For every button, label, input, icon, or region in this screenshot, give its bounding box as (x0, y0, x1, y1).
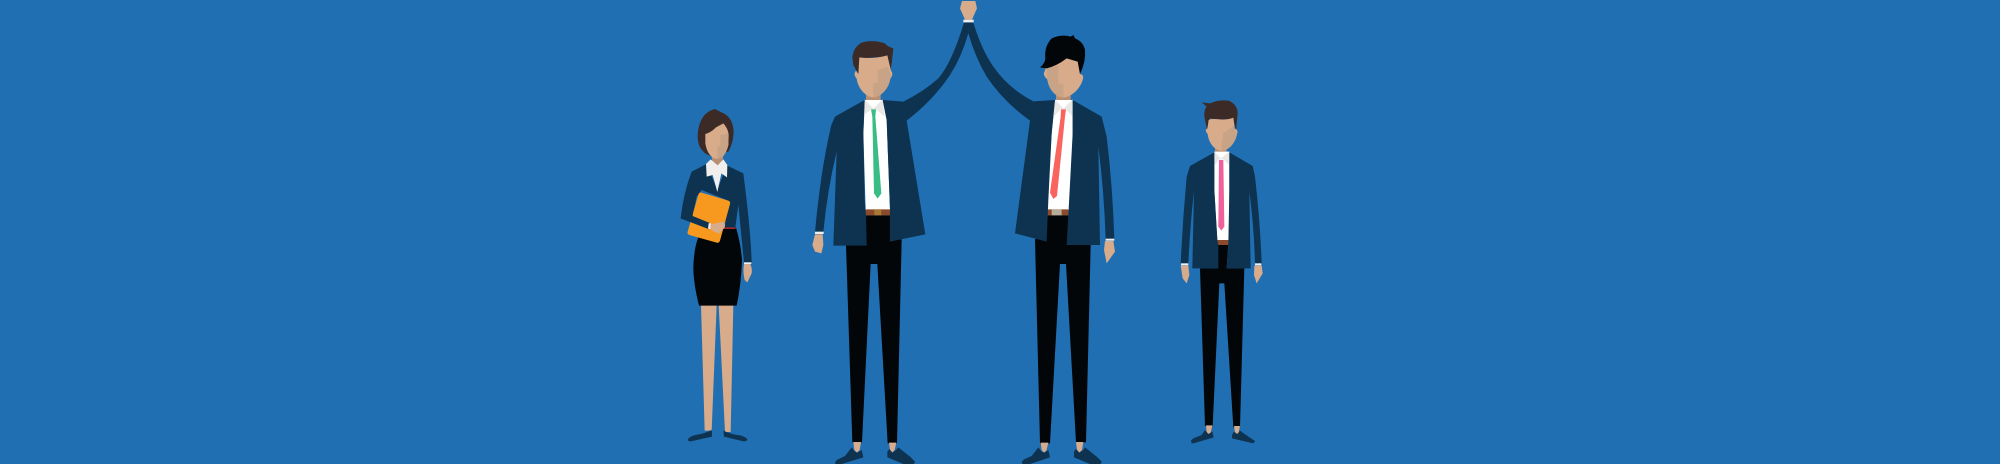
right man jacket (968, 23, 1114, 245)
left man pants (846, 215, 902, 443)
left man left cuff (815, 232, 824, 234)
woman face shadow (717, 133, 728, 159)
left man face shadow (873, 67, 891, 97)
woman right hand (743, 264, 752, 282)
figure: man in red tie raising arm (968, 23, 1115, 464)
left man left hand (812, 234, 823, 253)
woman jacket (681, 164, 752, 262)
small man shoes (1191, 430, 1255, 443)
left man hair (852, 41, 893, 74)
small man jacket (1181, 152, 1262, 268)
small man face shadow (1222, 126, 1237, 151)
woman collar (706, 159, 727, 192)
folder (687, 193, 730, 243)
right man face (1044, 53, 1083, 97)
right man shirt (1047, 100, 1073, 210)
woman shoes (688, 430, 747, 441)
woman skirt (693, 228, 742, 306)
woman legs (701, 305, 733, 432)
right man hair (1040, 35, 1085, 74)
left man upper body (812, 23, 973, 253)
woman hand on folder (711, 222, 725, 234)
right man face shadow (1047, 65, 1063, 97)
green tie (871, 109, 881, 199)
small man shirt (1214, 152, 1229, 240)
woman belt (723, 227, 736, 229)
left man jacket (815, 23, 973, 246)
small man hands (1181, 266, 1263, 283)
right man feet (1022, 442, 1102, 464)
right man collar (1053, 99, 1073, 117)
small man belt (1217, 240, 1228, 245)
pink tie (1218, 160, 1224, 231)
left man face (854, 55, 892, 97)
left man shirt (863, 100, 890, 210)
woman face (705, 123, 729, 159)
left man belt buckle (874, 209, 881, 215)
woman cuff (708, 223, 711, 229)
figure: small man in pink tie (1181, 100, 1263, 443)
right man belt (1047, 209, 1068, 215)
woman neck (712, 153, 723, 167)
right man pants (1035, 215, 1091, 443)
right man right cuff (1106, 239, 1114, 241)
small man neck (1215, 145, 1227, 156)
joined raised hands (960, 1, 977, 22)
small man ankles (1206, 425, 1240, 434)
woman hair (698, 109, 734, 156)
figure: man in green tie raising arm (812, 23, 973, 464)
figure: woman holding orange folder (681, 109, 752, 441)
raised fist (960, 1, 977, 20)
right man belt buckle (1052, 209, 1062, 215)
small man face (1206, 118, 1237, 151)
woman sleeve over folder (681, 200, 711, 229)
left man belt (866, 209, 890, 215)
small man cuffs (1181, 263, 1261, 265)
right man upper body (968, 23, 1115, 263)
small man collar (1214, 152, 1229, 166)
left man feet (835, 442, 915, 464)
right man neck (1056, 90, 1071, 108)
red tie (1050, 109, 1066, 199)
small man pants (1200, 243, 1244, 427)
left man collar (864, 99, 885, 117)
left man neck (866, 90, 881, 108)
raised cuff (963, 20, 974, 22)
small man hair (1202, 100, 1238, 131)
right man right hand (1104, 241, 1115, 263)
woman right cuff (744, 262, 751, 264)
